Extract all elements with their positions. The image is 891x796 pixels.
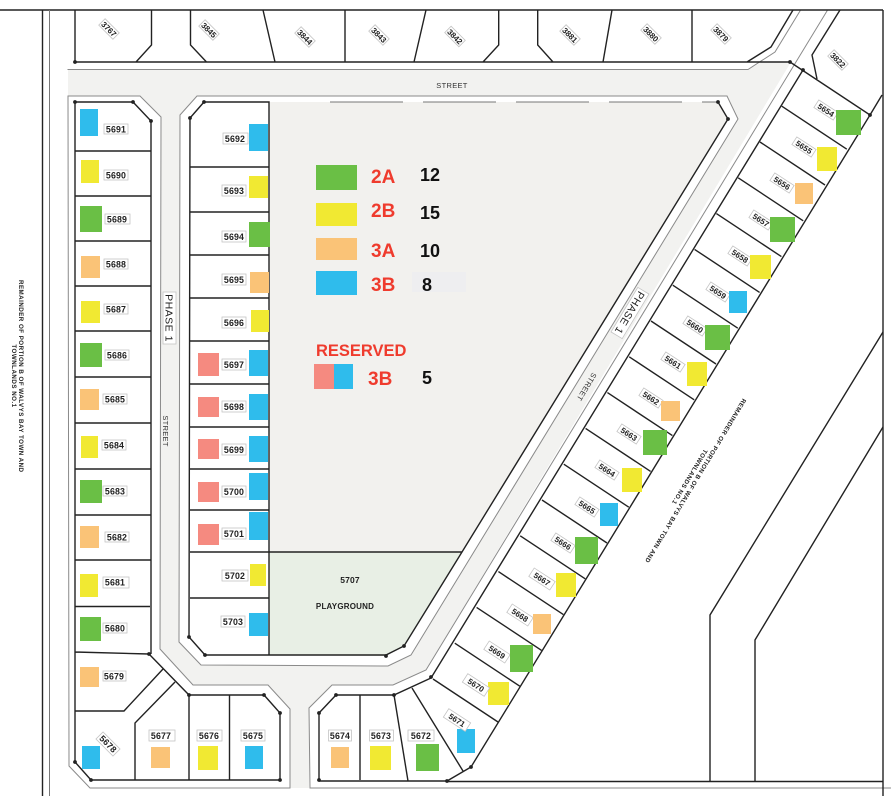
lot 5690: [81, 160, 128, 183]
lot 5696: [222, 310, 269, 332]
lot 5674: 5674: [330, 731, 350, 741]
top parcels labels: 3844: [295, 28, 315, 47]
lot 5659: [706, 282, 747, 313]
lot 5678: 5678: [97, 733, 119, 755]
lot 5660: 5660: [685, 318, 705, 335]
legend 2B: 2B: [371, 201, 395, 222]
legend 3A: 10: [420, 241, 440, 261]
lot 5677: 5677: [151, 731, 171, 741]
legend reserved: [314, 342, 432, 390]
lot 5680: [80, 617, 127, 641]
lot 5694: 5694: [224, 232, 244, 242]
top parcels labels: 3843: [369, 26, 389, 45]
legend: [314, 165, 466, 390]
lot 5661: [661, 352, 707, 386]
lot 5689: [80, 206, 130, 232]
lot 5682: [80, 526, 129, 548]
legend 2B: [316, 201, 440, 226]
lot 5669: [484, 641, 533, 672]
lot 5654: 5654: [816, 102, 836, 119]
lot 5697: [198, 350, 268, 376]
lot 5666: 5666: [553, 535, 573, 552]
lot 5681: 5681: [105, 578, 125, 588]
top parcels labels: 3881: [560, 26, 580, 45]
legend reserved: 3B: [368, 369, 392, 390]
lot 5658: [728, 246, 771, 279]
lot 5700: [198, 473, 268, 502]
lot 5670: [462, 674, 509, 705]
lot 5662: [639, 388, 680, 421]
lot 5675: 5675: [243, 731, 263, 741]
lot 5662: 5662: [641, 390, 661, 407]
top parcels labels: [98, 19, 848, 71]
lot 5661: 5661: [663, 354, 683, 371]
lot 5682: 5682: [107, 532, 127, 542]
lot 5663: 5663: [619, 426, 639, 443]
legend reserved: 5: [422, 368, 432, 388]
lot 5664: 5664: [597, 462, 617, 479]
lot 5672: [408, 730, 439, 771]
diagonal remainder text: TOWNLANDS NO.1: [670, 448, 708, 506]
lot 5702: [222, 564, 266, 586]
lot 5691: 5691: [106, 124, 126, 134]
lot 5699: [198, 436, 268, 462]
lot 5699: 5699: [224, 445, 244, 455]
top parcels labels: 3767: [99, 20, 119, 39]
lot 5703: 5703: [223, 617, 243, 627]
lot 5679: 5679: [104, 672, 124, 682]
lot 5674: [328, 730, 352, 768]
legend 3B: [316, 271, 466, 296]
lot 5676: [197, 730, 222, 770]
lot 5696: 5696: [224, 318, 244, 328]
playground area: [269, 552, 462, 656]
street and phase labels: PHASE 1: [162, 294, 174, 342]
top parcels labels: 3842: [445, 27, 465, 47]
lot 5659: 5659: [708, 284, 728, 301]
lot 5657: [749, 210, 795, 242]
street and phase labels: STREET: [436, 81, 468, 90]
top parcels labels: 3880: [641, 25, 661, 44]
lot 5673: 5673: [371, 731, 391, 741]
lot 5686: 5686: [107, 350, 127, 360]
lot 5684: [81, 436, 126, 458]
lot 5665: [575, 497, 618, 526]
lot 5664: [595, 460, 642, 492]
lot 5670: 5670: [466, 677, 486, 694]
legend 2A: 2A: [371, 167, 396, 188]
lot 5695: 5695: [224, 275, 244, 285]
lot 5688: [81, 256, 128, 278]
lot 5685: 5685: [105, 394, 125, 404]
legend 2A: 12: [420, 165, 440, 185]
legend reserved: RESERVED: [316, 342, 407, 360]
lot 5691: [80, 109, 128, 136]
lot 5654: [814, 100, 861, 135]
lot 5671: 5671: [447, 712, 467, 729]
lot 5686: [80, 343, 129, 367]
lot 5687: 5687: [106, 304, 126, 314]
lot 5667: [529, 568, 576, 597]
lot 5673: [370, 730, 394, 770]
left remainder text: [10, 280, 24, 473]
lot 5668: [507, 604, 551, 634]
lot 5697: 5697: [224, 360, 244, 370]
lot 5692: [223, 124, 268, 151]
lot 5676: 5676: [199, 731, 219, 741]
lot 5698: 5698: [224, 402, 244, 412]
open block: [269, 102, 728, 552]
lot 5658: 5658: [730, 248, 750, 265]
lot 5656: [770, 173, 813, 204]
playground label: PLAYGROUND: [316, 602, 374, 611]
lot 5669: 5669: [487, 644, 507, 661]
left column lots: [80, 109, 130, 769]
lot 5698: [198, 394, 268, 420]
lot 5695: [222, 272, 269, 293]
lot 5671: [443, 709, 475, 753]
diagonal remainder text: REMAINDER OF PORTION B OF WALVYS BAY TOWN AND: [643, 397, 747, 564]
lot 5668: 5668: [510, 607, 530, 624]
left remainder text: TOWNLANDS NO.1: [10, 344, 17, 408]
lot 5665: 5665: [577, 499, 597, 516]
lot 5666: [551, 533, 598, 564]
lot 5693: [222, 176, 268, 198]
lot 5680: 5680: [105, 624, 125, 634]
lot 5655: [792, 137, 837, 171]
lot 5667: 5667: [532, 571, 552, 588]
top parcels labels: 3822: [828, 51, 848, 70]
lot 5689: 5689: [107, 214, 127, 224]
lot 5675: [241, 730, 265, 769]
street and phase labels: STREET: [575, 371, 599, 403]
lot 5685: [80, 389, 127, 410]
lot 5672: 5672: [411, 731, 431, 741]
legend 3A: 3A: [371, 241, 396, 262]
legend 2A: [316, 165, 440, 190]
lot 5690: 5690: [106, 170, 126, 180]
lot 5693: 5693: [224, 186, 244, 196]
lot 5684: 5684: [104, 440, 124, 450]
lot 5688: 5688: [106, 260, 126, 270]
lot 5656: 5656: [772, 175, 792, 192]
lot 5700: 5700: [224, 487, 244, 497]
lot 5657: 5657: [751, 212, 771, 229]
lot 5687: [81, 301, 128, 323]
bottom lots: [149, 730, 439, 771]
left remainder text: REMAINDER OF PORTION B OF WALVYS BAY TOWN AND: [17, 280, 24, 473]
playground label: [316, 575, 374, 611]
street and phase labels: [161, 81, 649, 447]
lot 5702: 5702: [225, 571, 245, 581]
lot 5701: [198, 512, 268, 545]
top parcels labels: 3879: [711, 25, 731, 44]
lot 5660: [683, 316, 730, 350]
lot 5694: [222, 222, 270, 247]
lot 5663: [617, 424, 667, 455]
playground label: 5707: [340, 575, 360, 585]
lot 5677: [149, 730, 175, 768]
legend 3A: [316, 238, 440, 262]
lot 5683: 5683: [105, 486, 125, 496]
legend 3B: 8: [422, 275, 432, 295]
street and phase labels: STREET: [161, 415, 170, 447]
lot 5692: 5692: [225, 134, 245, 144]
legend 2B: 15: [420, 203, 440, 223]
top parcels labels: 3845: [199, 21, 219, 40]
lot 5655: 5655: [794, 139, 814, 156]
lot 5678: [82, 732, 120, 769]
lot 5701: 5701: [224, 529, 244, 539]
diagonal lots: [443, 100, 861, 753]
street and phase labels: PHASE 1: [612, 289, 647, 336]
centre column lots: [198, 124, 270, 636]
lot 5683: [80, 480, 127, 503]
lot 5703: [221, 613, 268, 636]
lot 5681: [80, 574, 129, 597]
legend 3B: 3B: [371, 275, 395, 296]
lot 5679: [80, 667, 126, 687]
